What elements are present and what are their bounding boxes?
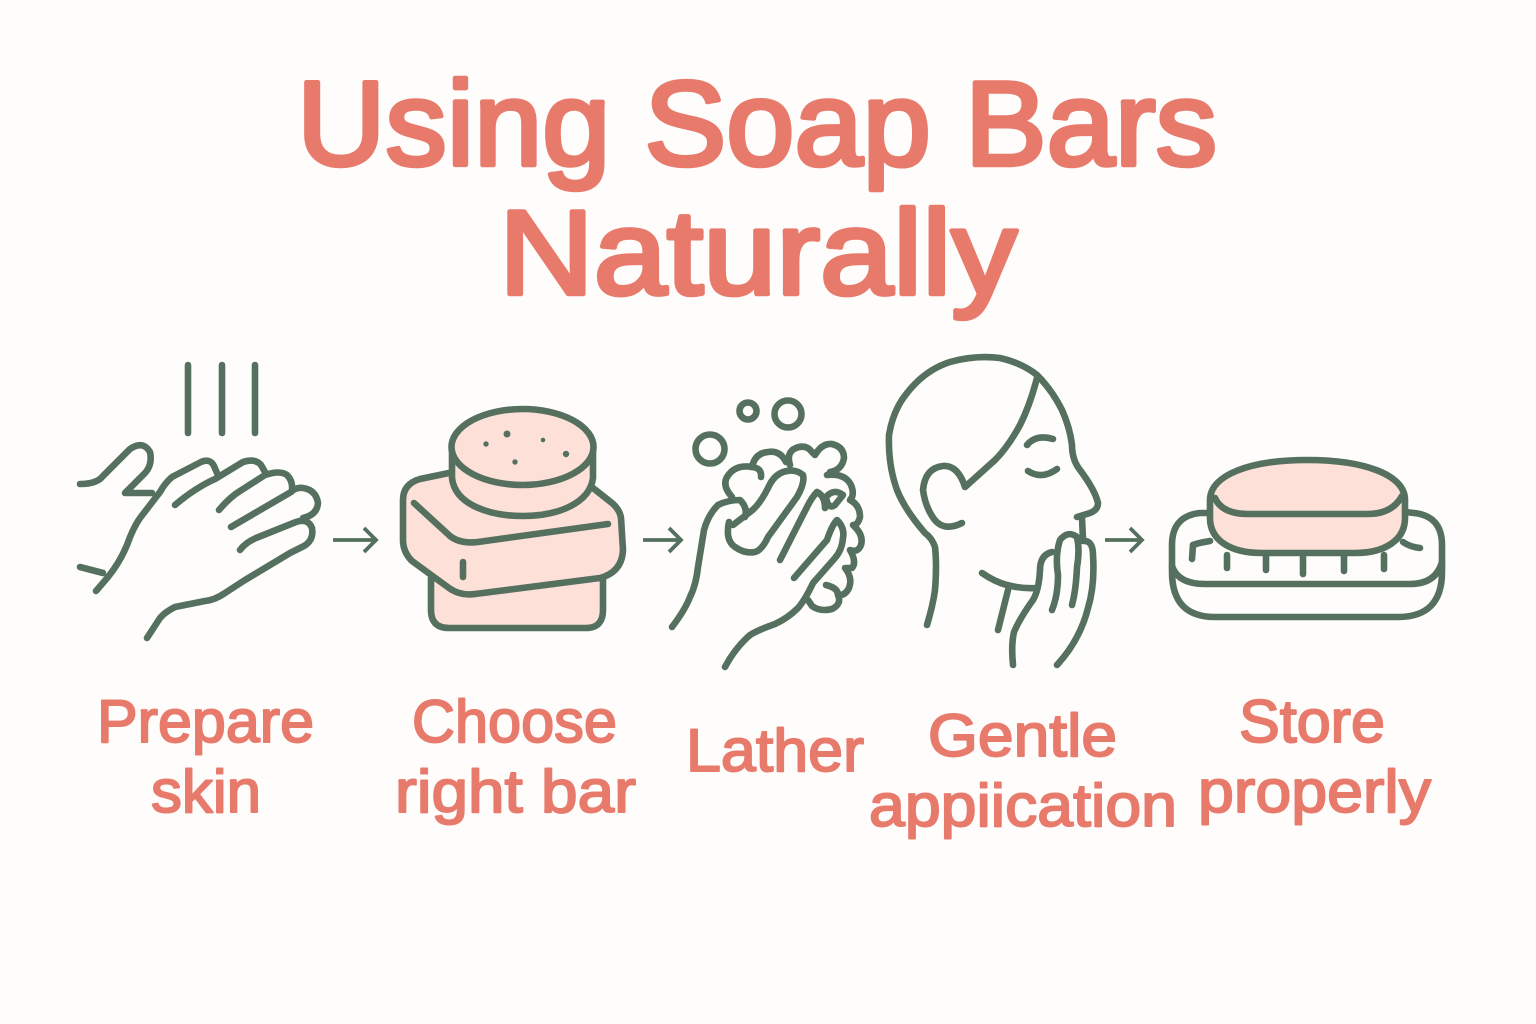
label: step 5: properly [1198,758,1431,825]
icon: stacked soap bars [403,409,623,628]
arrow: step 1 to step 2 [333,528,376,552]
title [297,57,1217,320]
icon: face profile with hand on cheek [889,357,1098,665]
arrow: step 2 to step 3 [643,528,681,552]
label: step 3: Lather [686,717,864,784]
label: step 1: skin [151,758,261,825]
icon: soap bar on dish [1172,460,1442,617]
label: step 4 [869,702,1177,839]
label: step 2: Choose [412,688,617,755]
title: Using Soap Bars [297,57,1217,191]
icon: lathering hands with bubbles [672,400,862,667]
label: step 1: Prepare [97,688,314,755]
label: step 1 [97,688,314,825]
title: Naturally [499,186,1017,320]
arrow: step 4 to step 5 [1105,528,1142,552]
label: step 5: Store [1239,688,1385,755]
icon: hand with water streams [80,365,318,638]
label: step 5 [1198,688,1431,825]
label: step 4: Gentle [928,702,1117,769]
label: step 2: right bar [395,758,636,825]
label: step 2 [395,688,636,825]
label: step 4: appiication [869,772,1177,839]
